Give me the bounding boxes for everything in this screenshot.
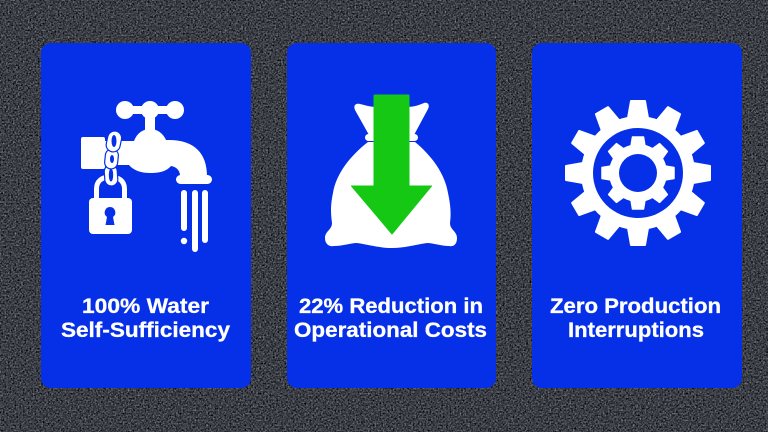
label: production interruptions: Interruptions xyxy=(568,319,704,342)
icon: gear xyxy=(566,101,710,245)
label: operational costs xyxy=(294,295,487,342)
label: water self-sufficiency: 100% Water xyxy=(82,295,209,318)
label: operational costs: 22% Reduction in xyxy=(299,295,483,318)
label: production interruptions: Zero Production xyxy=(550,295,721,318)
label: water self-sufficiency xyxy=(61,295,230,342)
icon: locked water tap xyxy=(81,101,212,252)
icon: money bag xyxy=(325,103,457,248)
label: water self-sufficiency: Self-Sufficiency xyxy=(61,319,230,342)
panel: operational costs xyxy=(287,43,496,388)
icon: green down arrow xyxy=(352,95,432,234)
label: production interruptions xyxy=(550,295,721,342)
panel: production interruptions xyxy=(532,43,742,388)
label: operational costs: Operational Costs xyxy=(294,319,487,342)
panel: water self-sufficiency xyxy=(41,43,251,388)
